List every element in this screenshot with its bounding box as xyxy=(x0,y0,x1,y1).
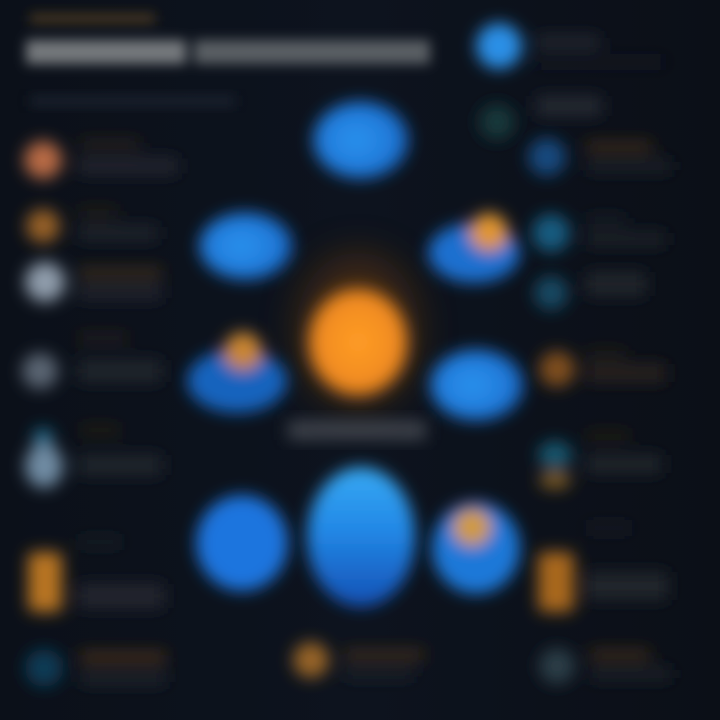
left item 2 xyxy=(26,208,158,243)
left item 6 xyxy=(28,538,164,612)
panel: right column xyxy=(476,23,672,684)
node: upper right blue with orange xyxy=(428,213,520,283)
node: mid left blue with orange xyxy=(187,332,287,413)
right item 2 xyxy=(479,96,602,140)
left item 7 xyxy=(25,649,166,687)
right item 7 xyxy=(538,432,662,489)
right item 8 xyxy=(538,524,668,612)
left subheading xyxy=(30,95,235,107)
right item 5 xyxy=(534,272,646,310)
node: center orange xyxy=(308,288,408,396)
left item 4 xyxy=(22,334,162,389)
node: bottom center tall blue xyxy=(307,467,415,607)
right item 6 xyxy=(539,350,666,387)
node: top blue xyxy=(313,101,409,179)
left item 1 xyxy=(24,140,178,179)
center caption xyxy=(288,420,426,440)
panel: left column xyxy=(22,95,235,687)
node: bottom right blue with orange xyxy=(432,502,520,594)
left item 3 xyxy=(25,262,162,302)
right item 9 xyxy=(539,648,672,684)
title block xyxy=(26,14,430,64)
node: upper left blue xyxy=(199,212,293,280)
right item 3 xyxy=(528,138,672,176)
panel: central diagram xyxy=(187,101,524,678)
right item 1 xyxy=(476,23,666,69)
node: bottom left blue xyxy=(196,495,288,591)
bottom center icon and label xyxy=(293,642,424,678)
node: center glow xyxy=(296,252,420,408)
node: mid right blue xyxy=(430,349,524,421)
left item 5 xyxy=(25,426,162,488)
right item 4 xyxy=(532,214,666,252)
